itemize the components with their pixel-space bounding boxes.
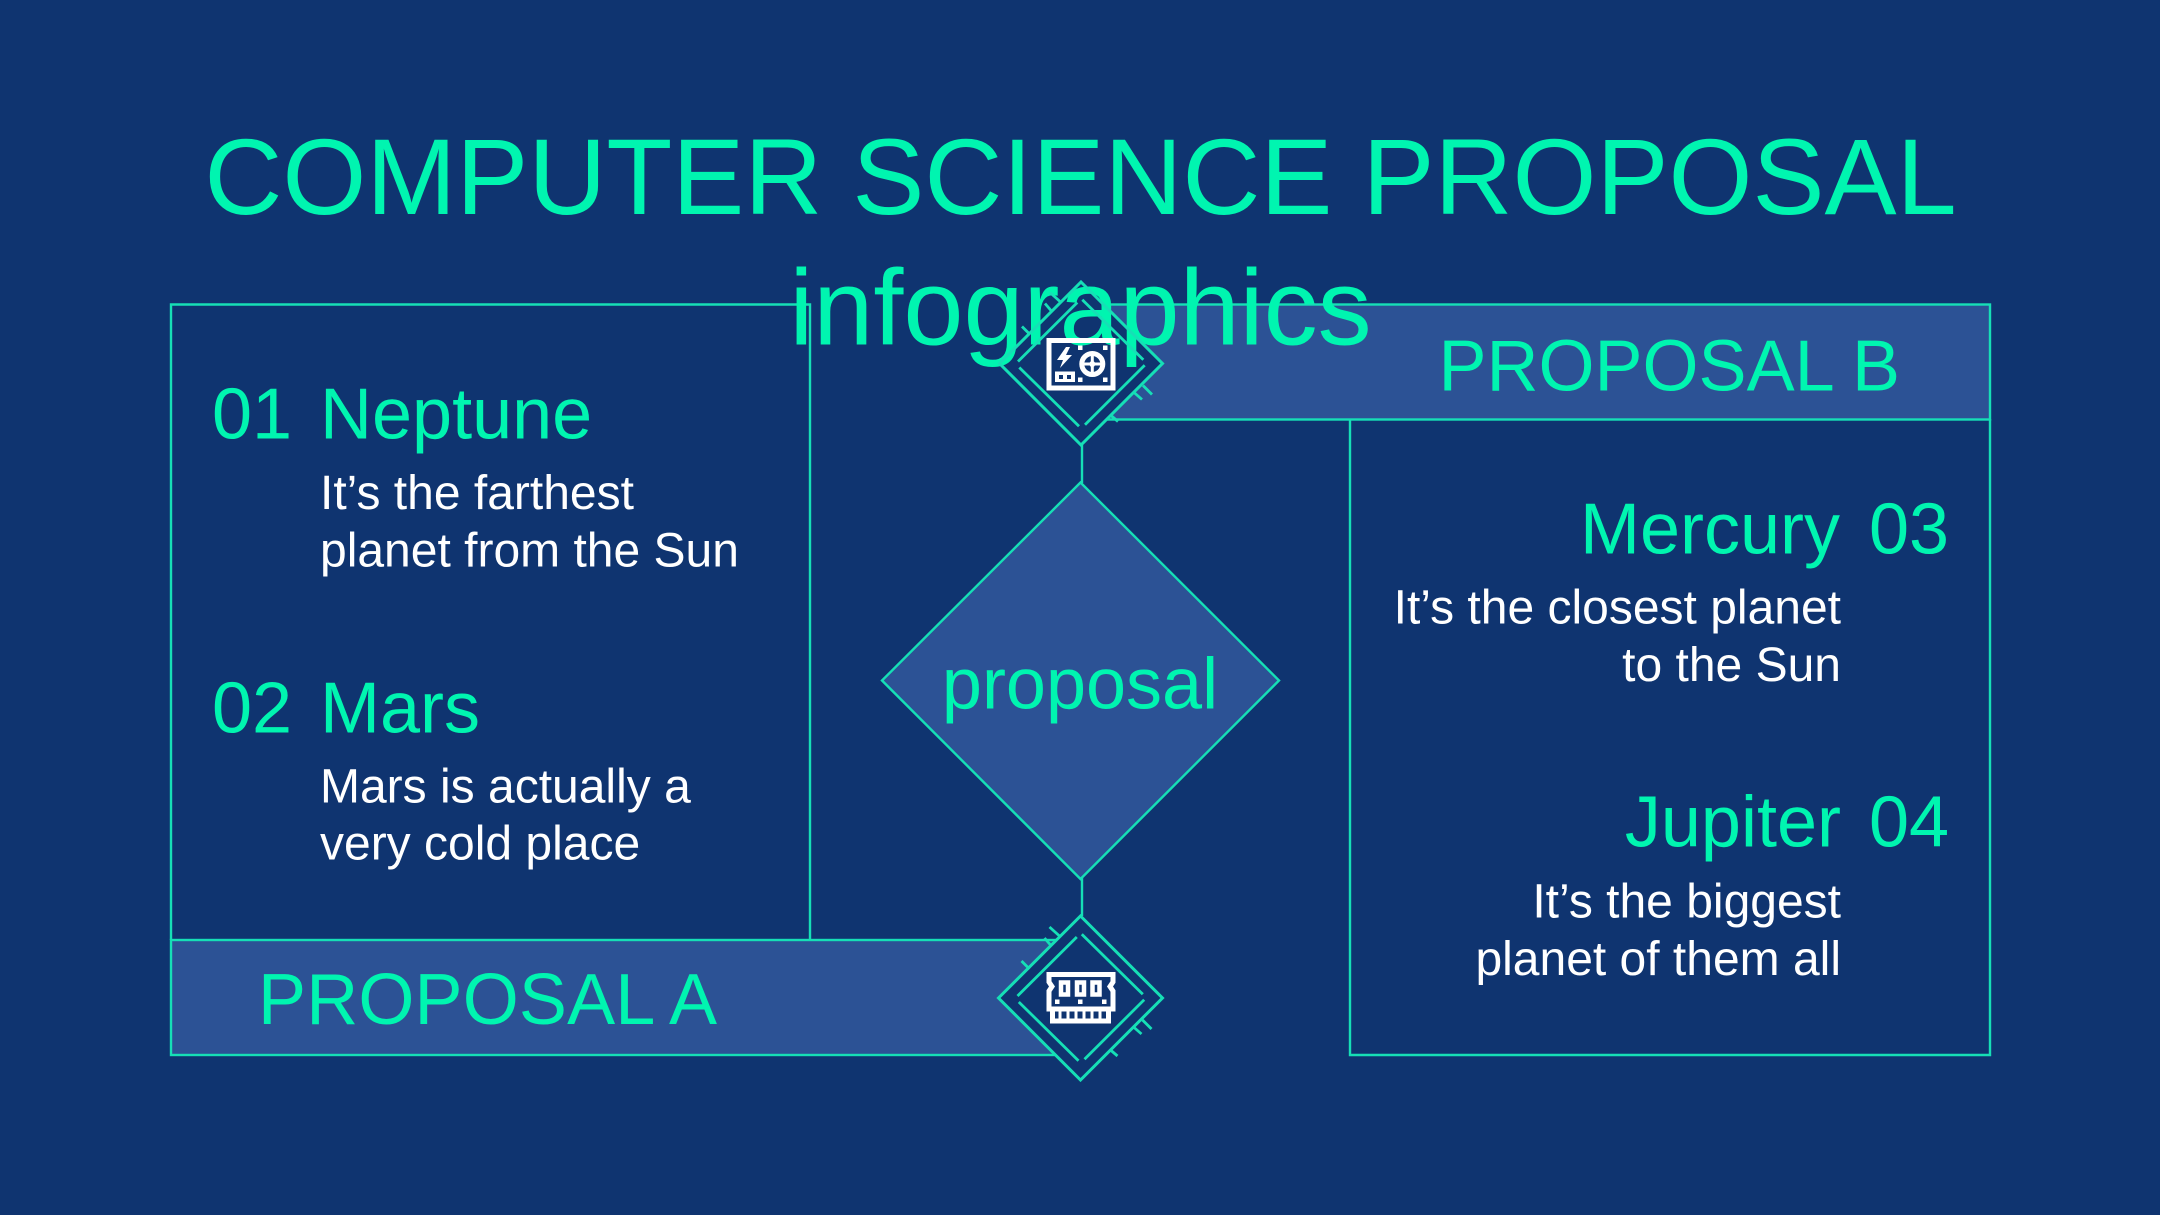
item 03: Mercury: Mercury <box>1580 489 1840 569</box>
item 02: Mars <box>212 668 691 870</box>
backing: bottom icon diamond fill <box>998 916 1162 1080</box>
icon: memory module chip <box>998 916 1162 1080</box>
item 01: Neptune: 01 <box>212 374 292 454</box>
item 01: Neptune: planet from the Sun <box>320 525 739 578</box>
panel: proposal B bar <box>1090 304 1990 420</box>
item 03: Mercury: 03 <box>1869 489 1949 569</box>
label: proposal A: PROPOSAL A <box>258 960 717 1040</box>
backing: top icon diamond fill <box>1000 282 1162 445</box>
item 04: Jupiter: It’s the biggest <box>1532 875 1841 928</box>
item 03: Mercury: It’s the closest planet <box>1394 581 1841 634</box>
item 02: Mars: very cold place <box>320 817 640 870</box>
item 04: Jupiter: 04 <box>1869 783 1949 863</box>
item 02: Mars: 02 <box>212 668 292 748</box>
panel: right planets box <box>1350 419 1990 1055</box>
item 01: Neptune: Neptune <box>320 374 592 454</box>
panel: proposal A bar <box>171 940 1071 1055</box>
item 02: Mars: Mars <box>320 668 480 748</box>
connector: top diamond to center diamond <box>1081 445 1083 483</box>
item 03: Mercury: to the Sun <box>1622 639 1841 692</box>
label: proposal B: PROPOSAL B <box>1438 327 1900 407</box>
panel: left planets box <box>171 304 810 940</box>
item 04: Jupiter <box>1475 783 1949 986</box>
item 01: Neptune: It’s the farthest <box>320 467 634 520</box>
item 01: Neptune <box>212 374 739 578</box>
icon: power supply chip <box>1000 282 1162 445</box>
title: COMPUTER SCIENCE PROPOSAL <box>204 116 1957 237</box>
item 03: Mercury <box>1394 489 1949 692</box>
title: infographics <box>789 246 1372 367</box>
label: center proposal: proposal <box>942 644 1218 724</box>
item 04: Jupiter: Jupiter <box>1625 783 1841 863</box>
item 02: Mars: Mars is actually a <box>320 760 691 813</box>
diamond: center proposal shape <box>882 482 1279 879</box>
item 04: Jupiter: planet of them all <box>1475 933 1841 986</box>
title <box>204 116 1957 367</box>
connector: center diamond to bottom diamond <box>1081 878 1083 916</box>
